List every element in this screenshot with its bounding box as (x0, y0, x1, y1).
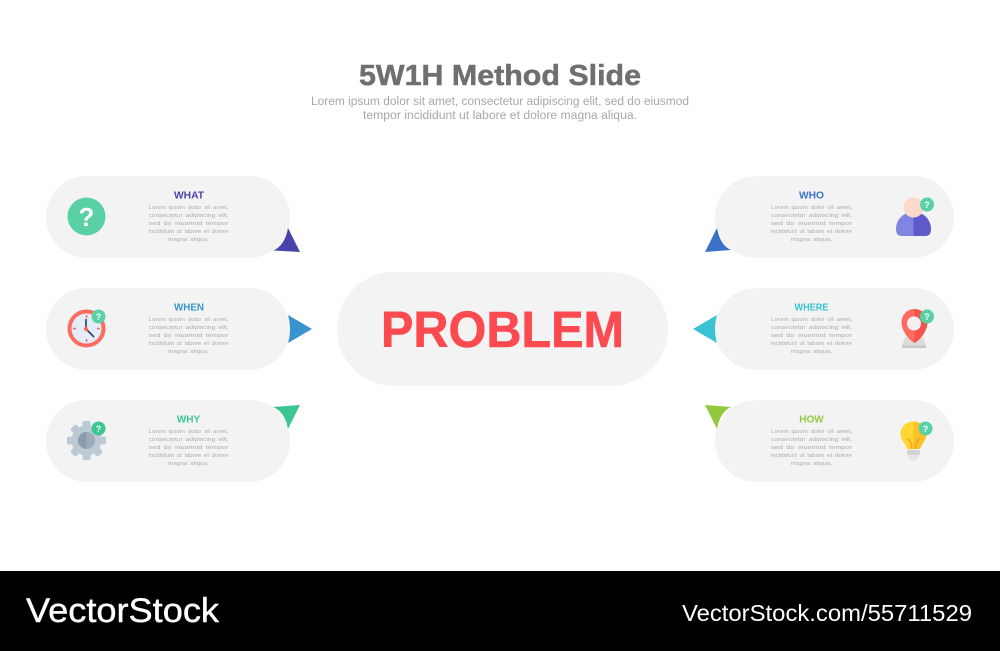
text: what: consectetur adipiscing elit, (148, 213, 229, 219)
panel: how (705, 400, 954, 482)
text: who: incididunt ut labore et dolore (771, 229, 852, 235)
icon: map pin: ? (924, 312, 930, 322)
text: why: consectetur adipiscing elit, (148, 437, 229, 443)
text: how: incididunt ut labore et dolore (771, 453, 852, 459)
text: what (148, 205, 229, 243)
text: where: magna aliqua. (791, 349, 832, 355)
text: who: Lorem ipsum dolor sit amet, (771, 205, 852, 211)
text: where: consectetur adipiscing elit, (771, 325, 853, 331)
text: who (771, 205, 853, 243)
central problem pill: PROBLEM (381, 301, 624, 358)
panel: where (693, 288, 954, 370)
panel: why (46, 400, 300, 482)
icon: light bulb: ? (923, 424, 928, 434)
icon: light bulb (900, 422, 932, 461)
text: what: magna aliqua. (168, 237, 209, 243)
text: when (148, 317, 229, 355)
arrow: why (273, 405, 300, 429)
title: 5W1H Method Slide (359, 60, 641, 92)
text: when: consectetur adipiscing elit, (148, 325, 229, 331)
panel: who (705, 176, 954, 258)
text: where: sed do eiusmod tempor (771, 333, 852, 339)
heading: when: WHEN (174, 302, 204, 314)
subtitle: tempor incididunt ut labore et dolore magna aliqua. (363, 110, 637, 122)
icon: person: ? (924, 200, 930, 210)
icon: gear (67, 421, 106, 460)
arrow: when (288, 315, 312, 343)
text: when: incididunt ut labore et dolore (148, 341, 228, 347)
panel: when (46, 288, 312, 370)
text: why: Lorem ipsum dolor sit amet, (148, 429, 229, 435)
text: what: sed do eiusmod tempor (148, 221, 229, 227)
text: what: incididunt ut labore et dolore (148, 229, 228, 235)
subtitle: Lorem ipsum dolor sit amet, consectetur adipiscing elit, sed do eiusmod (311, 96, 689, 108)
footer band: VectorStock.com/55711529 (682, 600, 972, 626)
text: why: incididunt ut labore et dolore (148, 453, 228, 459)
heading: where: WHERE (794, 302, 829, 314)
text: when: Lorem ipsum dolor sit amet, (148, 317, 229, 323)
icon: question circle: ? (79, 202, 94, 232)
text: when: magna aliqua. (168, 349, 209, 355)
text: how: sed do eiusmod tempor (771, 445, 852, 451)
text: how (771, 429, 853, 467)
text: how: consectetur adipiscing elit, (771, 437, 853, 443)
icon: gear: ? (96, 424, 101, 434)
subtitle (311, 96, 689, 122)
text: who: consectetur adipiscing elit, (771, 213, 853, 219)
text: who: sed do eiusmod tempor (771, 221, 852, 227)
arrow: what (274, 228, 300, 252)
text: who: magna aliqua. (791, 237, 832, 243)
text: where: incididunt ut labore et dolore (771, 341, 852, 347)
footer band (0, 571, 1000, 651)
text: how: magna aliqua. (791, 461, 832, 467)
arrow: where (693, 315, 717, 343)
arrow: how (705, 405, 731, 429)
text: why (148, 429, 229, 467)
icon: question circle (68, 198, 106, 236)
central problem pill (337, 272, 668, 386)
heading: how: HOW (799, 414, 824, 426)
icon: map pin (902, 309, 934, 348)
text: why: sed do eiusmod tempor (148, 445, 229, 451)
footer band: VectorStock (26, 592, 220, 630)
panel: what (46, 176, 300, 258)
text: what: Lorem ipsum dolor sit amet, (148, 205, 229, 211)
text: where (771, 317, 853, 355)
heading: why: WHY (177, 414, 201, 426)
icon: person (896, 198, 934, 236)
icon: clock (70, 310, 106, 346)
icon: clock: ? (96, 312, 101, 322)
heading: what: WHAT (174, 190, 204, 202)
heading: who: WHO (799, 190, 824, 202)
text: when: sed do eiusmod tempor (148, 333, 229, 339)
text: where: Lorem ipsum dolor sit amet, (771, 317, 852, 323)
text: how: Lorem ipsum dolor sit amet, (771, 429, 852, 435)
text: why: magna aliqua. (168, 461, 209, 467)
arrow: who (705, 228, 731, 252)
